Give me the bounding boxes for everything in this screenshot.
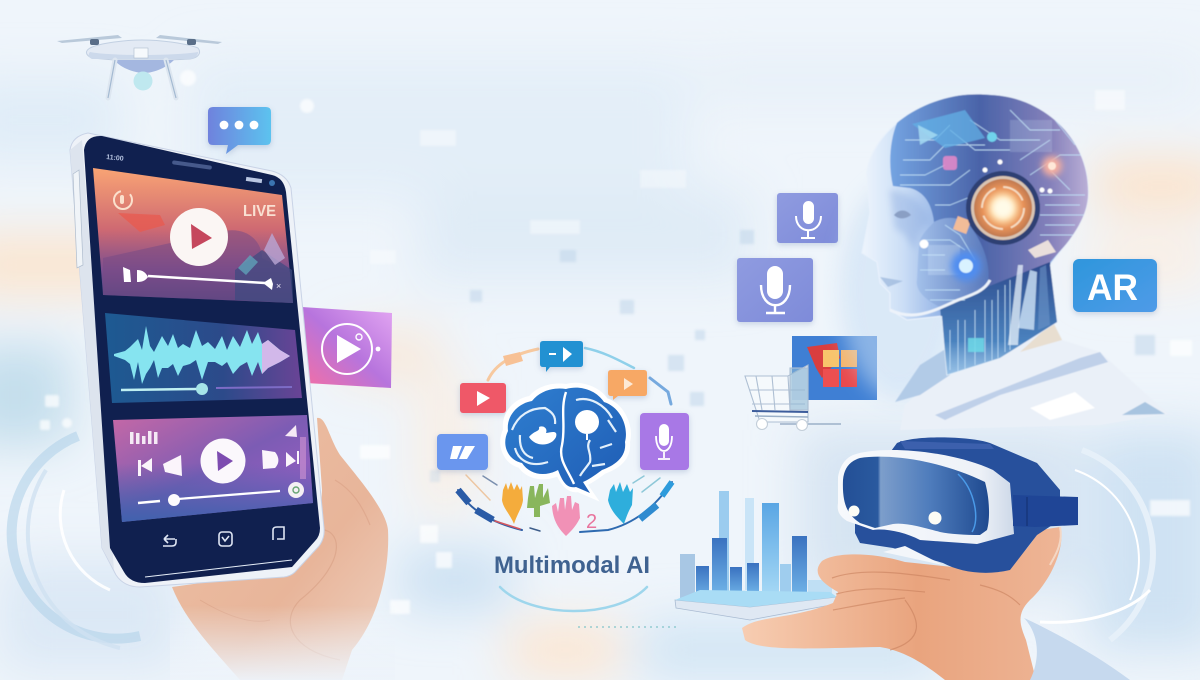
icon: red video [460, 383, 506, 413]
shoulders [900, 322, 1168, 430]
hand holding phone [170, 418, 395, 680]
icon: microphone small [777, 193, 838, 243]
VR headset [838, 437, 1078, 573]
label AR: AR [1087, 267, 1138, 308]
icon: shopping cart [745, 365, 841, 430]
headset lens [843, 457, 989, 535]
icon: shopping box [792, 336, 877, 400]
phone screen [84, 136, 320, 583]
panel: music player [113, 415, 313, 522]
city platform [675, 597, 837, 620]
hologram city [675, 491, 837, 620]
brain [502, 385, 629, 497]
smartphone: 11:00 [106, 154, 124, 163]
head shape [862, 94, 1088, 375]
smartphone [70, 133, 324, 587]
hand holding VR headset [742, 527, 1130, 680]
panel: video: × [276, 281, 281, 291]
floating video card [302, 307, 392, 388]
panel: video [93, 168, 293, 303]
icon: blue arrow tile [540, 341, 583, 372]
circuit area [890, 94, 1089, 375]
headset white shell [838, 450, 1014, 544]
label AR [1073, 259, 1157, 312]
phone body [70, 133, 324, 587]
glowing core [966, 171, 1040, 245]
label LIVE: LIVE [243, 203, 276, 220]
hand icons: 2 [586, 511, 597, 533]
icon: chat bubble [208, 107, 271, 154]
icon: blue tile [437, 434, 488, 470]
icon: drone [57, 35, 222, 98]
play button [170, 208, 228, 266]
AI head [840, 94, 1168, 430]
strap block [1013, 495, 1078, 527]
glowing nodes [920, 132, 1062, 352]
multimodal AI emblem [437, 341, 689, 611]
icon: orange video [608, 370, 647, 400]
icon: purple microphone [640, 413, 689, 470]
headset rear [855, 437, 1060, 573]
panel: audio waveform [105, 313, 302, 403]
hand icons [502, 482, 633, 536]
nav buttons [163, 527, 284, 546]
icon: microphone large [737, 258, 813, 322]
label: Multimodal AI: Multimodal AI [494, 552, 650, 579]
ring segments [458, 348, 672, 611]
face highlights [890, 190, 930, 250]
sleeve [1024, 618, 1130, 680]
